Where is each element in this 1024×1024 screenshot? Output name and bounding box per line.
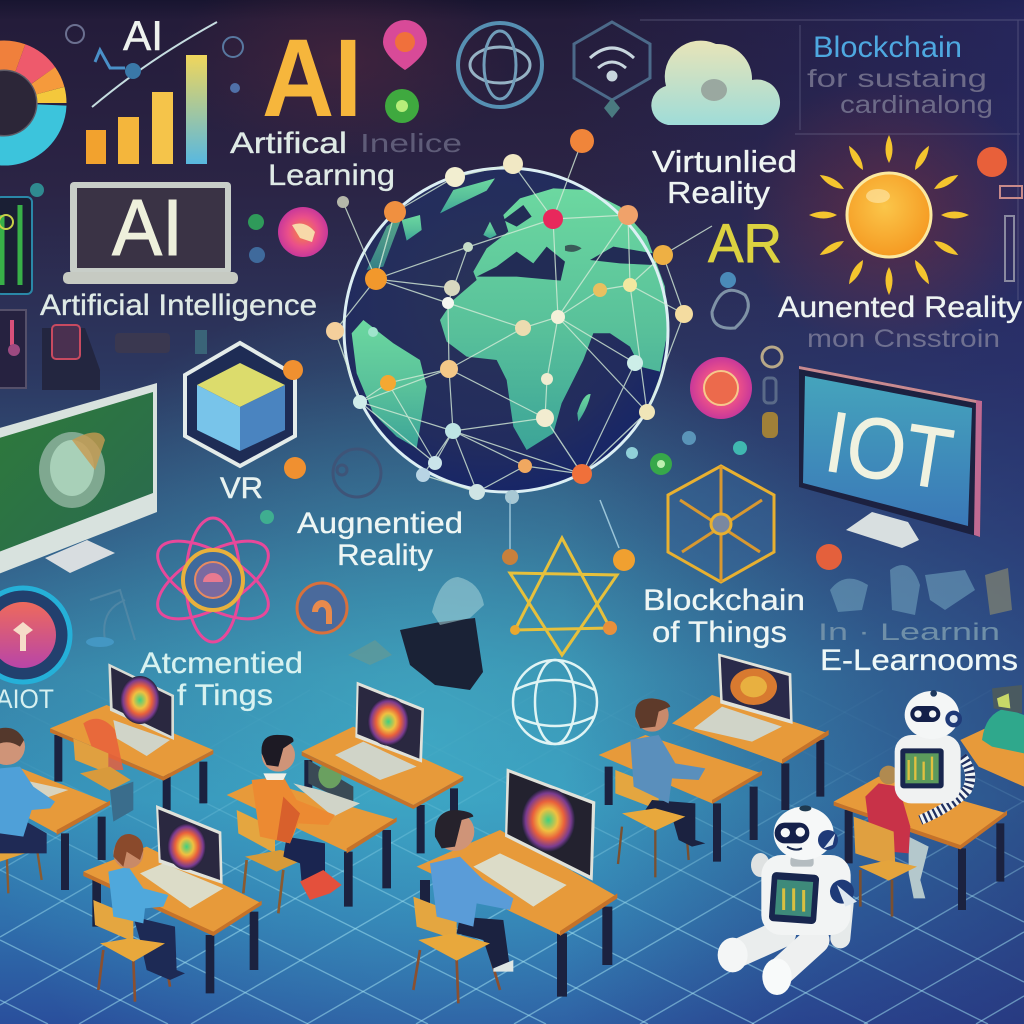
robot: small (895, 690, 970, 820)
icon: small orange circle (297, 583, 347, 633)
icon: faded circle (333, 449, 381, 497)
desk C with student in orange (227, 735, 397, 913)
icon: faded icon cluster (830, 565, 1012, 615)
continents (352, 178, 667, 450)
text: augmented of things: f Tings (177, 679, 273, 712)
icon: blockchain hexagon (668, 466, 774, 582)
text: blockchain of things: Blockchain (643, 584, 805, 617)
desk H with laptop (672, 653, 829, 810)
bar chart (86, 22, 217, 164)
text: augmented of things (140, 647, 303, 712)
text: artificial intelligence: Artificial Intelligence (40, 289, 317, 322)
icon: AIOT ring (0, 588, 70, 682)
icon: green dot (385, 89, 419, 123)
desk G with student (599, 698, 762, 877)
icon: sun (809, 135, 969, 295)
text: blockchain of things: of Things (652, 616, 787, 649)
desk J with student in green (960, 685, 1024, 787)
text: faded construction: mon Cnsstroin (807, 325, 1000, 353)
icon: atom (146, 518, 280, 642)
text: blockchain top: Blockchain (813, 31, 962, 64)
globe rim (344, 168, 668, 492)
icon: left side devices (0, 197, 207, 390)
classroom scene (0, 653, 1024, 1003)
icon: pink circle (278, 207, 328, 257)
desk B with laptop (302, 682, 463, 853)
text: artificial learning: Learning (268, 159, 395, 192)
icon: faded plant left (86, 590, 135, 647)
text: faded inference: Inelice (360, 128, 462, 158)
text: virtual reality: Reality (667, 175, 771, 210)
text: augmented of things: Atcmentied (140, 647, 303, 680)
desk E with student (83, 805, 262, 1002)
desk A with laptop (50, 663, 213, 822)
text: artificial learning (230, 127, 395, 192)
desk D with student (0, 728, 110, 893)
robot: large (718, 805, 857, 995)
text: virtual reality (652, 144, 797, 210)
network globe (326, 129, 712, 504)
icon: wire globe (513, 660, 597, 744)
panel: IOT monitor (799, 366, 982, 548)
globe ocean (344, 168, 668, 492)
icon: AR pink circle (690, 357, 752, 419)
panel: IOT monitor: IOT (819, 394, 959, 508)
icon: red dot (977, 147, 1007, 177)
desk F with student (413, 768, 617, 1003)
icon: right edge gadgets (1000, 186, 1022, 281)
text: faded blockchain subtitle (807, 65, 993, 119)
desk I with student in red (834, 766, 1007, 917)
panel: AI monitor: AI (112, 183, 183, 272)
icon: VR cube hexagon (185, 343, 295, 466)
floor grid (0, 690, 1024, 1024)
text: faded blockchain subtitle: for sustaing (807, 65, 987, 93)
icon: red dot lower (816, 544, 842, 570)
heading: AI gold: AI (262, 17, 362, 140)
faded rules top right (640, 20, 1024, 300)
icon: swirl sphere (458, 23, 542, 107)
icon: cloud (651, 41, 780, 125)
text: AI small: AI (123, 12, 163, 59)
text: faded learning: In · Learnin (818, 619, 1000, 646)
heading: AR: AR (708, 212, 782, 274)
text: augmented reality right: Aunented Reality (778, 291, 1022, 324)
network nodes (326, 129, 693, 504)
text: faded blockchain subtitle: cardinalong (840, 91, 993, 119)
text: augmented reality center: Augnentied (297, 507, 463, 540)
icon: faint top-left doodles (30, 25, 243, 197)
text: augmented reality center: Reality (337, 539, 433, 572)
panel: green monitor (0, 383, 157, 575)
icon: ring and gadget (712, 272, 782, 438)
icon: small side dots (248, 214, 747, 524)
icon: gold star (502, 500, 635, 655)
icon: pink pin (383, 20, 427, 70)
text: artificial learning: Artifical (230, 127, 347, 160)
icon: green dot right (650, 453, 672, 475)
text: e-learnooms: E-Learnooms (820, 644, 1018, 677)
text: augmented reality center (297, 507, 463, 572)
icon: orange dots (283, 360, 306, 479)
text: blockchain of things (643, 584, 805, 649)
icon: wifi hexagon (574, 22, 650, 118)
icon: dark figure (348, 577, 484, 690)
panel: AI monitor (63, 182, 238, 284)
text: VR: VR (220, 472, 263, 505)
network links (335, 141, 712, 492)
icon: donut chart (0, 55, 52, 151)
text: virtual reality: Virtunlied (652, 144, 797, 179)
